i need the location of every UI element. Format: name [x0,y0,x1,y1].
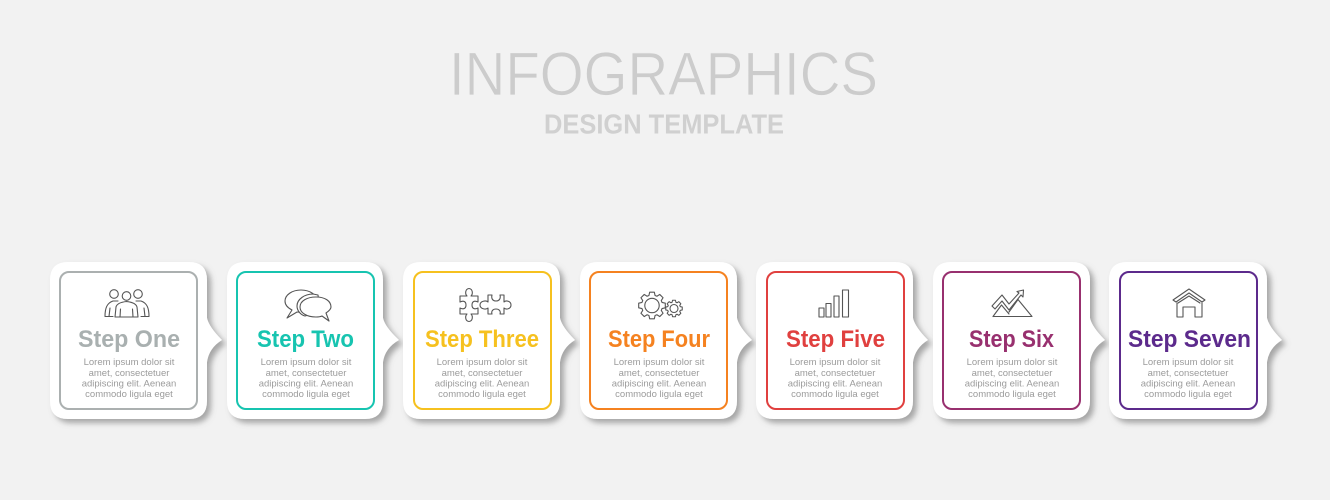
icon: gears [639,292,682,319]
title: INFOGRAPHICS [449,40,878,108]
heading: step four: Step Four [608,326,710,353]
text: step six: amet, consectetuer [972,368,1052,379]
icon: speech bubbles [285,290,331,321]
text: step five: adipiscing elit. Aenean [788,378,882,390]
heading: step one: Step One [78,326,180,353]
text: step five: amet, consectetuer [795,368,875,379]
icon: people [105,290,149,317]
icon: puzzle pieces [460,288,511,322]
text: step four: amet, consectetuer [619,368,699,379]
panel: step seven [1109,262,1282,419]
text: step one: commodo ligula eget [85,389,173,400]
panel: step one [50,262,222,419]
text: step four: Lorem ipsum dolor sit [614,357,705,368]
heading: step seven: Step Seven [1128,326,1251,353]
text: step seven: amet, consectetuer [1148,368,1228,379]
text: step six: adipiscing elit. Aenean [965,378,1059,390]
icon: mountains with arrow [992,290,1032,316]
text: step two: Lorem ipsum dolor sit [261,357,352,368]
heading: step three: Step Three [425,326,539,353]
panel: step five [756,262,928,419]
text: step two: adipiscing elit. Aenean [259,378,353,390]
text: step three: adipiscing elit. Aenean [435,378,529,390]
icon: house [1173,289,1205,317]
text: step six: Lorem ipsum dolor sit [967,357,1058,368]
text: step five: Lorem ipsum dolor sit [790,357,881,368]
heading: step two: Step Two [257,326,354,353]
text: step two: commodo ligula eget [262,389,350,400]
text: step one: Lorem ipsum dolor sit [84,357,175,368]
text: step three: Lorem ipsum dolor sit [437,357,528,368]
text: step one: adipiscing elit. Aenean [82,378,176,390]
panel: step six [933,262,1105,419]
text: step three: commodo ligula eget [438,389,526,400]
text: step seven: Lorem ipsum dolor sit [1143,357,1234,368]
text: step seven: commodo ligula eget [1144,389,1232,400]
text: step one: amet, consectetuer [89,368,169,379]
subtitle: DESIGN TEMPLATE [544,108,784,140]
text: step seven: adipiscing elit. Aenean [1141,378,1235,390]
text: step two: amet, consectetuer [266,368,346,379]
text: step four: commodo ligula eget [615,389,703,400]
panel: step two [227,262,399,419]
text: step six: commodo ligula eget [968,389,1056,400]
text: step three: amet, consectetuer [442,368,522,379]
panel: step four [580,262,752,419]
heading: step five: Step Five [786,326,885,353]
text: step five: commodo ligula eget [791,389,879,400]
icon: bar chart [819,290,848,317]
panel: step three [403,262,575,419]
text: step four: adipiscing elit. Aenean [612,378,706,390]
heading: step six: Step Six [969,326,1055,353]
